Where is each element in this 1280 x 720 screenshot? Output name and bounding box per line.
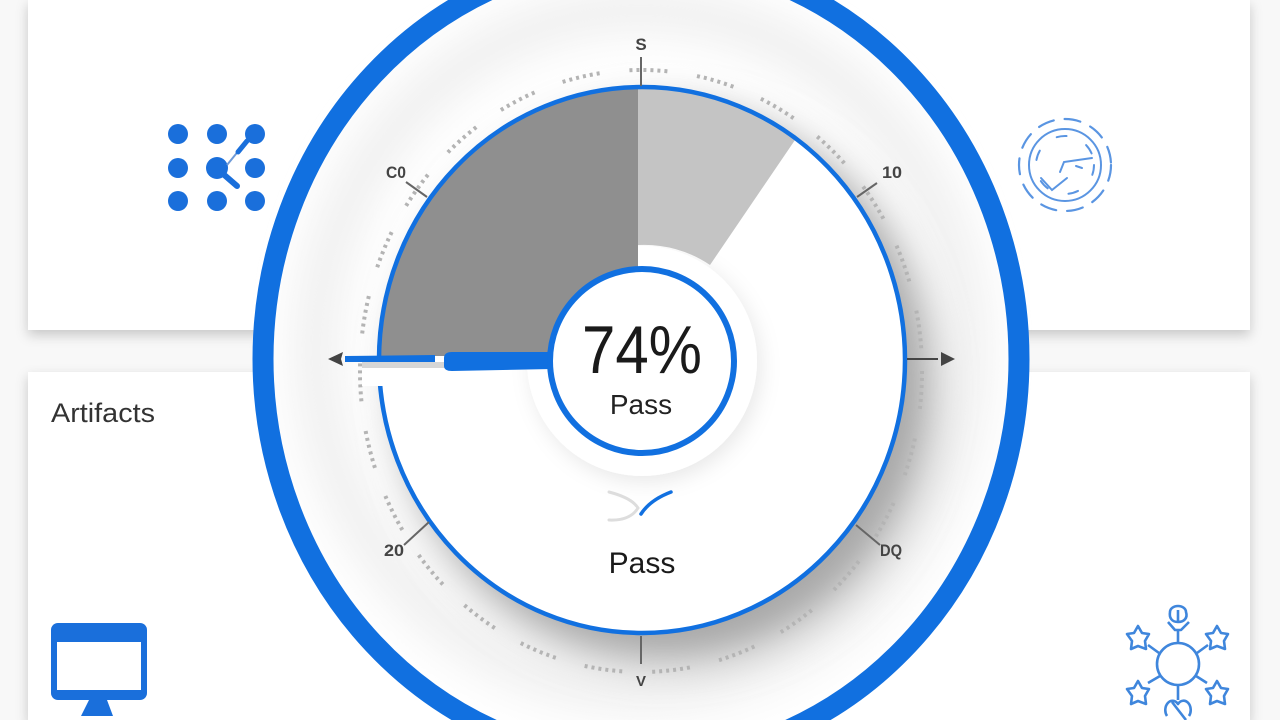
- label: lower Pass: Pass: [609, 547, 675, 580]
- icon: dot grid network: [168, 124, 265, 211]
- gauge: outer disc: [263, 0, 1019, 720]
- label: hub Pass: Pass: [610, 389, 672, 420]
- gauge: center halo: [527, 246, 757, 476]
- label: CO: C0: [386, 163, 406, 182]
- gauge: ring gap: [362, 361, 442, 386]
- gauge: right arrow: [907, 352, 955, 366]
- label: DQ: DQ: [880, 541, 902, 560]
- gauge: needle: [328, 352, 552, 371]
- value: 74%: 74%: [582, 312, 702, 388]
- gauge: dial shadow: [397, 107, 933, 663]
- gauge: compass ticks: [404, 57, 880, 664]
- gauge: soft band around dial: [316, 10, 966, 690]
- panel: top left card: [28, 0, 628, 330]
- label: 10: 10: [882, 163, 902, 182]
- panel: bottom left card: [28, 372, 628, 720]
- gauge: outer tick marks: [360, 70, 922, 672]
- gauge: dial face: [379, 87, 905, 633]
- gauge: blue outer ring: [263, 0, 1019, 720]
- panel: bottom right card: [650, 372, 1250, 720]
- label: V: V: [636, 673, 646, 690]
- gauge: center hub: [550, 269, 734, 453]
- icon: dashed circle: [1019, 119, 1111, 211]
- label: S: S: [635, 35, 647, 54]
- gauge: blue dial ring: [379, 87, 905, 633]
- icon: check mark: [609, 492, 671, 520]
- chart: light gray sector: [638, 87, 795, 265]
- label: 20: 20: [384, 541, 404, 560]
- icon: hub with stars: [1127, 606, 1228, 720]
- heading: Artifacts: Artifacts: [51, 398, 155, 428]
- icon: monitor: [51, 623, 147, 716]
- panel: top right card: [650, 0, 1250, 330]
- chart: dark gray sector: [379, 87, 638, 356]
